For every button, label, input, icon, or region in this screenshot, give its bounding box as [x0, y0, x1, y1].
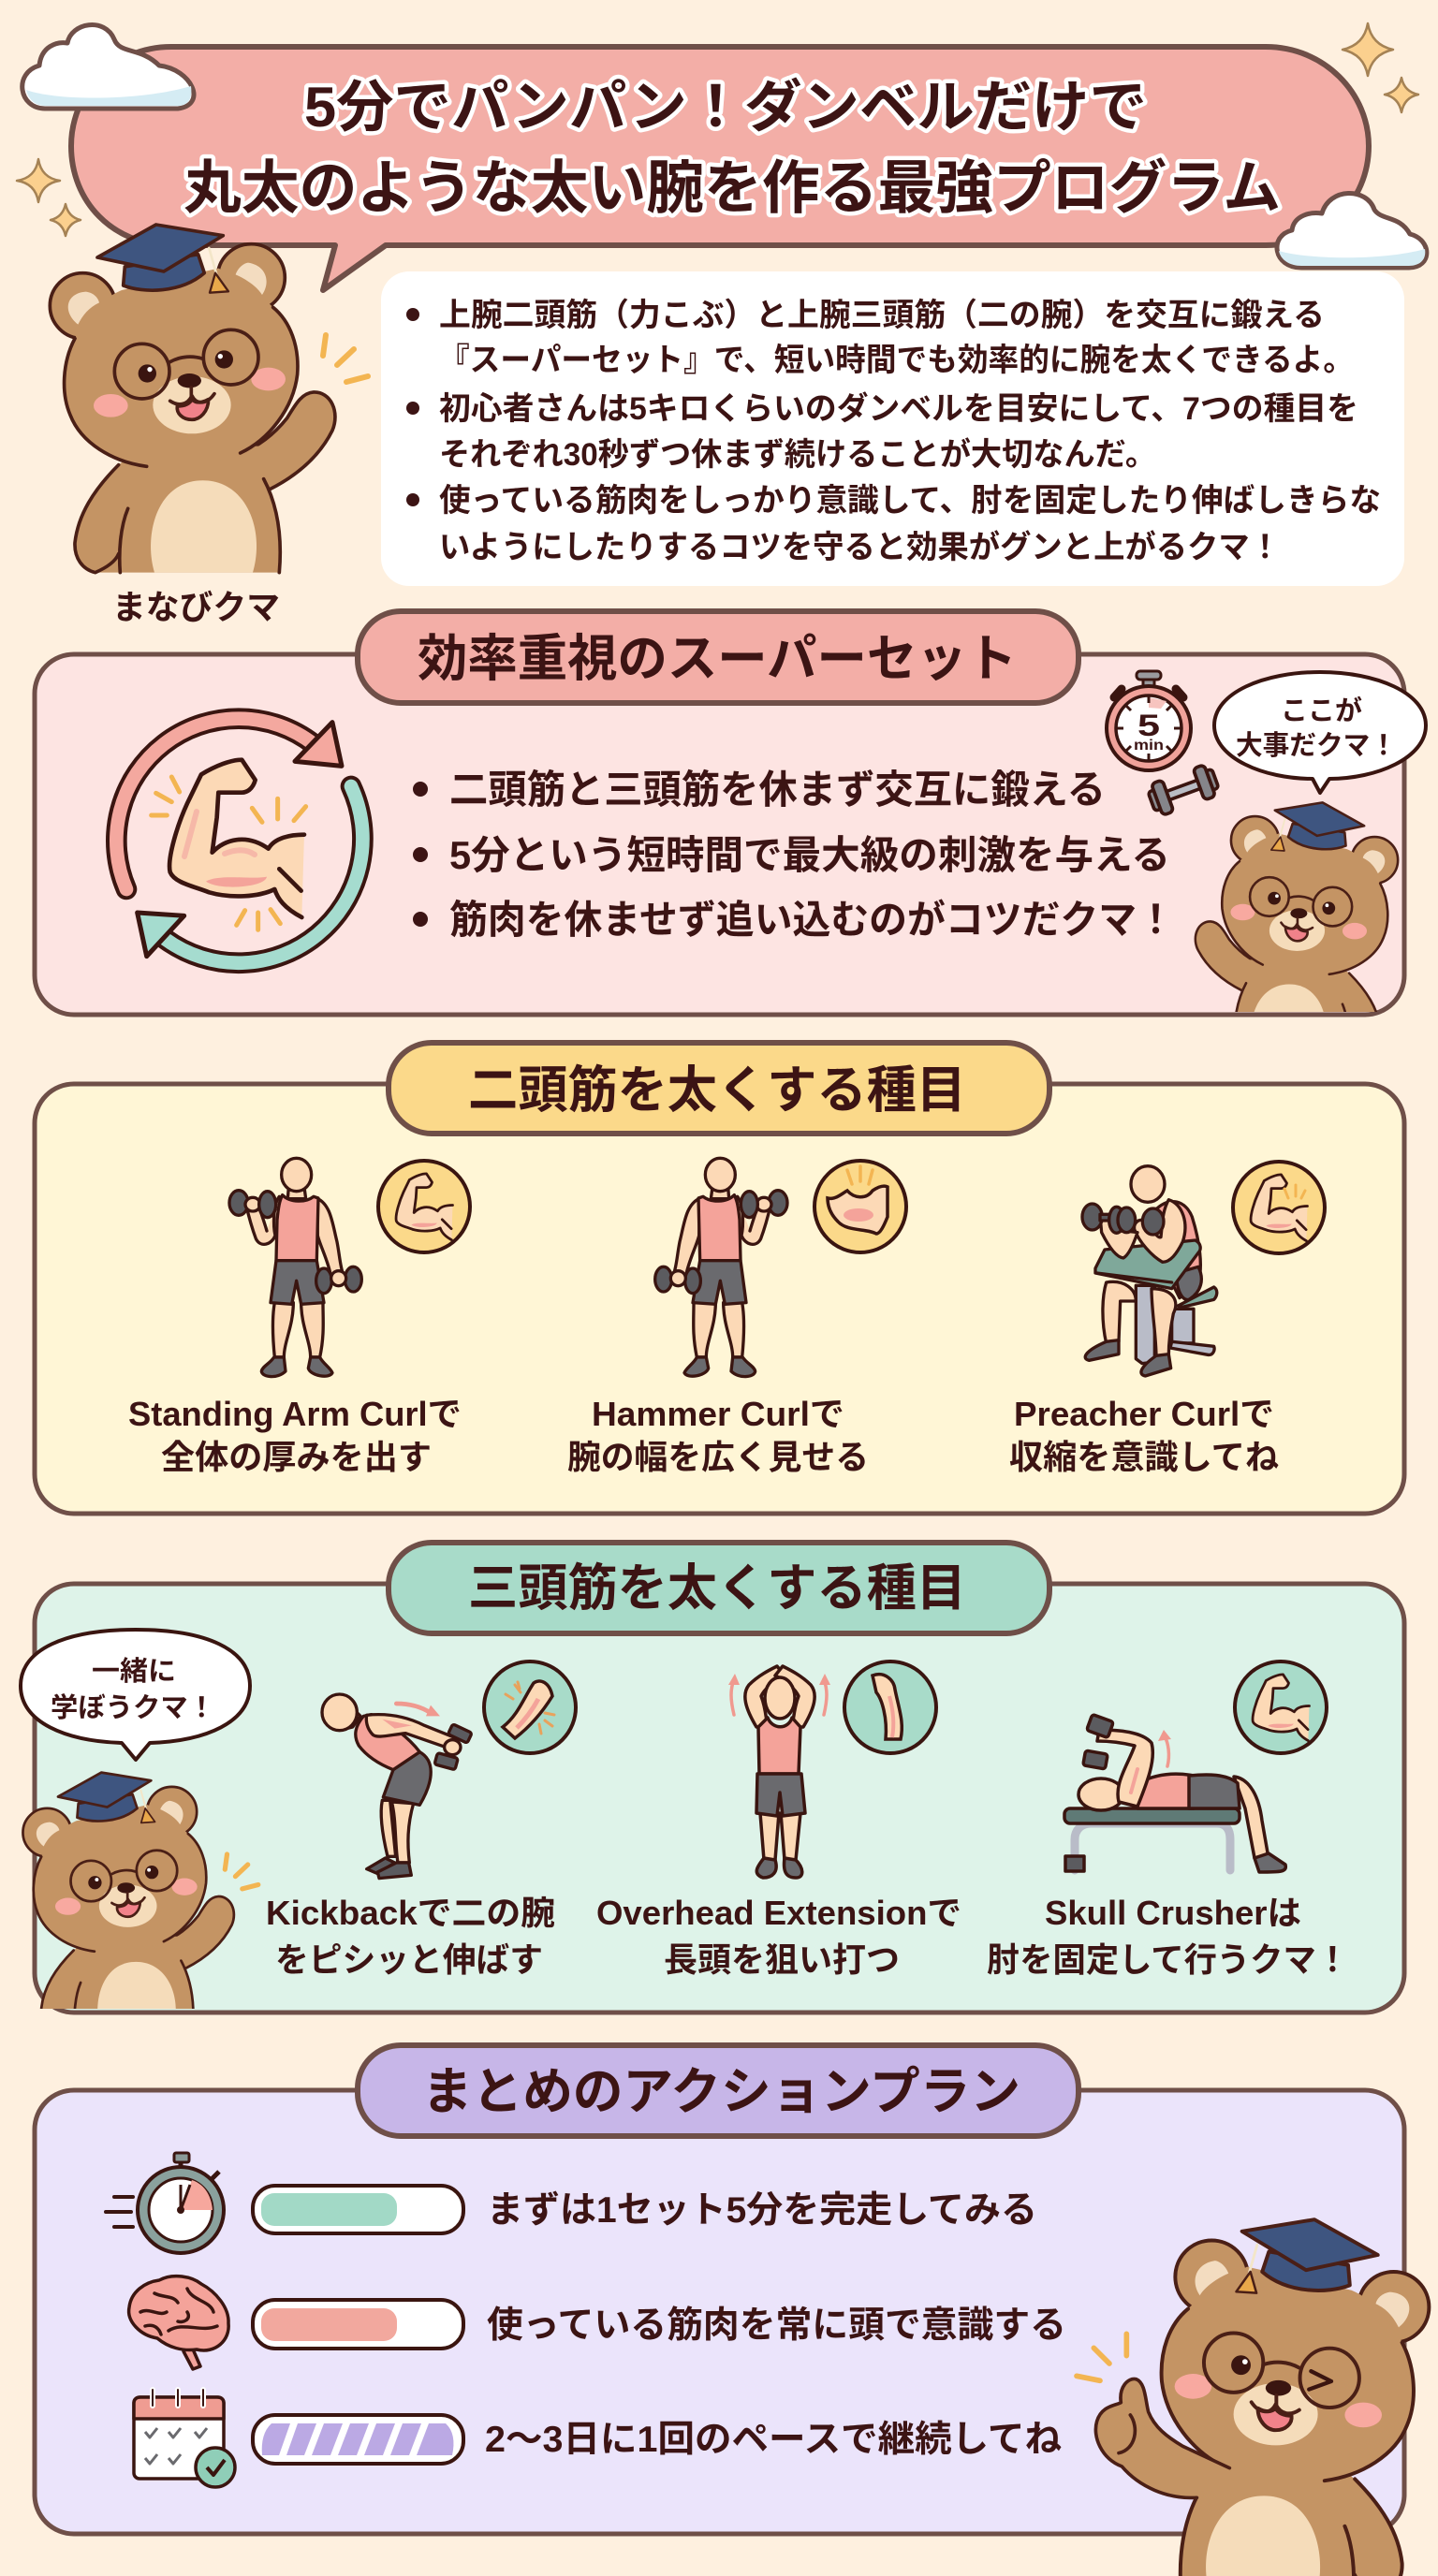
label: preacher curl [1009, 1395, 1279, 1476]
label: kickback: Kickbackで二の腕 [266, 1894, 555, 1932]
figure: overhead extension [728, 1666, 830, 1878]
figure: hammer curl [655, 1158, 787, 1377]
action text 1: まずは1セット5分を完走してみる [487, 2190, 1037, 2231]
label: skull crusher [987, 1894, 1349, 1979]
label: kickback: をピシッと伸ばす [275, 1940, 543, 1979]
label: kickback [266, 1894, 555, 1979]
intro bullets: それぞれ30秒ずつ休まず続けることが大切なんだ。 [439, 436, 1156, 473]
label: hammer curl: Hammer Curlで [592, 1395, 844, 1433]
speech bubble: let's learn together: 学ぼうクマ！ [51, 1692, 215, 1723]
icon: timer [106, 2153, 224, 2253]
label: skull crusher: 肘を固定して行うクマ！ [987, 1940, 1349, 1979]
action text 2: 使っている筋肉を常に頭で意識する [487, 2305, 1066, 2346]
cloud top right [1277, 193, 1427, 268]
panel: action plan [35, 2045, 1404, 2534]
main bear character [50, 225, 368, 573]
intro panel [381, 271, 1404, 586]
heading: biceps [389, 1043, 1049, 1134]
label: standing arm curl [128, 1395, 462, 1476]
bear: action plan thumbs up [1077, 2219, 1429, 2576]
label: standing arm curl: 全体の厚みを出す [161, 1438, 432, 1476]
panel: biceps exercises [35, 1043, 1404, 1514]
badge: triceps kickback muscle [484, 1661, 576, 1753]
heading: triceps: 三頭筋を太くする種目 [468, 1560, 966, 1617]
figure: kickback [322, 1694, 472, 1879]
speech bubble: here is important [1214, 672, 1426, 793]
bear: superset panel [1195, 801, 1399, 1012]
action text 3: 2〜3日に1回のペースで継続してね [485, 2420, 1062, 2460]
speech bubble: here is important: ここが [1281, 695, 1362, 726]
heading: biceps: 二頭筋を太くする種目 [468, 1062, 966, 1119]
icon: calendar [134, 2390, 235, 2487]
heading: superset: 効率重視のスーパーセット [418, 631, 1017, 687]
label: hammer curl [567, 1395, 869, 1476]
figure: skull crusher [1064, 1714, 1285, 1872]
superset bullets: 筋肉を休ませず追い込むのがコツだクマ！ [449, 898, 1175, 942]
intro bullets: 使っている筋肉をしっかり意識して、肘を固定したり伸ばしきらな [439, 483, 1381, 519]
icon: 5 min stopwatch: min [1134, 738, 1164, 754]
speech bubble: here is important: 大事だクマ！ [1236, 730, 1397, 761]
title speech bubble [71, 47, 1369, 290]
heading: triceps [389, 1543, 1049, 1633]
cloud top left [22, 25, 194, 109]
panel: triceps exercises [21, 1543, 1404, 2030]
superset bullets [413, 768, 1175, 942]
figure: preacher curl [1082, 1166, 1217, 1376]
badge: preacher curl muscle [1233, 1162, 1325, 1253]
figure: standing arm curl [229, 1158, 361, 1377]
icon: 5 min stopwatch [1107, 671, 1191, 770]
progress bar: row 1 [253, 2186, 463, 2233]
speech bubble: let's learn together: 一緒に [92, 1656, 176, 1687]
bear: triceps panel [22, 1773, 258, 2030]
panel: superset [35, 611, 1426, 1049]
heading: superset [358, 611, 1078, 703]
heading: action plan [358, 2045, 1078, 2136]
intro bullets [406, 298, 1381, 565]
intro bullets: 上腕二頭筋（力こぶ）と上腕三頭筋（二の腕）を交互に鍛える [439, 298, 1325, 333]
icon: 5 min stopwatch: 5 [1137, 709, 1160, 742]
label: preacher curl: Preacher Curlで [1014, 1395, 1274, 1433]
title text: 丸太のような太い腕を作る最強プログラム [183, 156, 1281, 221]
icon: brain [129, 2276, 228, 2369]
label: hammer curl: 腕の幅を広く見せる [567, 1438, 869, 1476]
label: overhead extension: Overhead Extensionで [596, 1894, 961, 1932]
badge: skull crusher muscle [1235, 1661, 1327, 1753]
label: overhead extension [596, 1894, 961, 1979]
title text: 5分でパンパン！ダンベルだけで [304, 76, 1147, 139]
label: preacher curl: 収縮を意識してね [1009, 1438, 1279, 1476]
intro bullets: 『スーパーセット』で、短い時間でも効率的に腕を太くできるよ。 [439, 343, 1354, 378]
speech bubble: let's learn together [21, 1630, 250, 1760]
label: standing arm curl: Standing Arm Curlで [128, 1395, 462, 1433]
badge: overhead extension muscle [844, 1661, 936, 1753]
icon: dumbbell [1146, 763, 1221, 817]
badge: hammer curl muscle [814, 1161, 906, 1252]
label: overhead extension: 長頭を狙い打つ [664, 1940, 900, 1979]
intro bullets: 初心者さんは5キロくらいのダンベルを目安にして、7つの種目を [439, 390, 1358, 427]
heading: action plan: まとめのアクションプラン [422, 2064, 1020, 2120]
superset bullets: 5分という短時間で最大級の刺激を与える [449, 833, 1170, 877]
badge: standing arm curl muscle [378, 1161, 470, 1252]
progress bar: row 3 [253, 2415, 463, 2464]
bear name: まなびクマ [112, 588, 280, 626]
label: skull crusher: Skull Crusherは [1045, 1894, 1301, 1932]
intro bullets: いようにしたりするコツを守ると効果がグンと上がるクマ！ [439, 529, 1281, 565]
sparkles [17, 23, 1418, 236]
superset bullets: 二頭筋と三頭筋を休まず交互に鍛える [449, 768, 1106, 812]
icon: superset arrows and flexed arm [116, 719, 362, 963]
progress bar: row 2 [253, 2300, 463, 2349]
title text [183, 76, 1281, 221]
